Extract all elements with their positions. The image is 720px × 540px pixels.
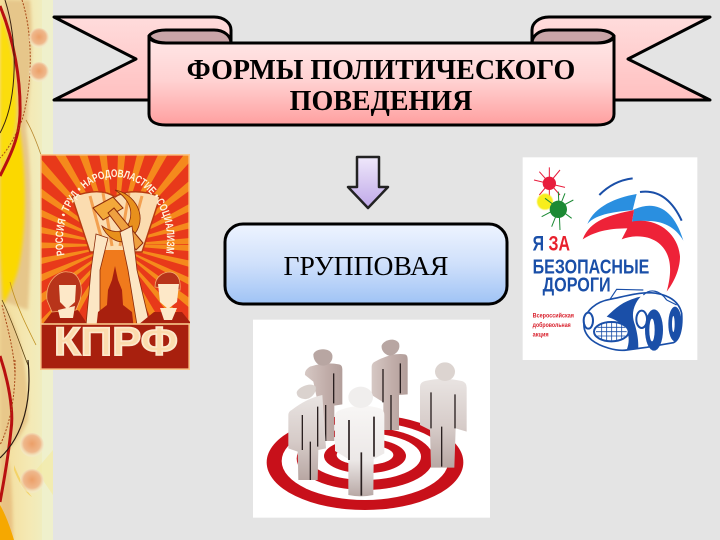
- poster: KPRF: [40, 154, 190, 370]
- person: front: [335, 387, 384, 496]
- slogan: ДОРОГИ: [543, 274, 611, 297]
- woman: [43, 271, 87, 324]
- decorative side strip: [0, 0, 53, 540]
- slogan: акция: [533, 331, 549, 338]
- open book: [72, 192, 160, 252]
- image: people on target: [253, 320, 490, 518]
- person: right: [420, 362, 467, 468]
- ribbon right tail: [532, 17, 710, 100]
- box: group form: [225, 224, 507, 304]
- arm left: [86, 234, 108, 325]
- central glow: [100, 250, 136, 324]
- stars: [534, 167, 573, 230]
- box: group form: ГРУППОВАЯ: [284, 250, 448, 281]
- logo: safe roads: [523, 157, 697, 360]
- slogan: БЕЗОПАСНЫЕ: [533, 255, 649, 278]
- circular slogan: РОССИЯ • ТРУД • НАРОДОВЛАСТИЕ • СОЦИАЛИЗМ: [55, 169, 175, 256]
- flag: [583, 178, 683, 292]
- slogan: Я ЗА: [533, 232, 570, 256]
- slogan: Всероссийская: [533, 312, 574, 320]
- ribbon left tail: [54, 17, 231, 100]
- lower band: [40, 324, 190, 370]
- person: left: [288, 385, 326, 480]
- ribbon main panel: [149, 36, 614, 125]
- slogan: добровольная: [533, 321, 571, 329]
- sickle: [102, 190, 140, 242]
- banner: title ribbon: [54, 17, 710, 125]
- soldier: [140, 272, 190, 324]
- slogan: [533, 232, 649, 338]
- target: [267, 415, 463, 510]
- title text: ФОРМЫ ПОЛИТИЧЕСКОГО: [187, 55, 575, 86]
- person: back left: [305, 349, 342, 441]
- arrow: down: [348, 157, 388, 208]
- title text: ПОВЕДЕНИЯ: [290, 86, 472, 117]
- hammer: [93, 197, 123, 220]
- arm right: [120, 226, 150, 325]
- sun rays: [35, 165, 195, 325]
- kremlin tower: [96, 266, 134, 324]
- party name: КПРФ: [54, 320, 178, 364]
- person: back right: [372, 340, 408, 430]
- car: [584, 289, 682, 351]
